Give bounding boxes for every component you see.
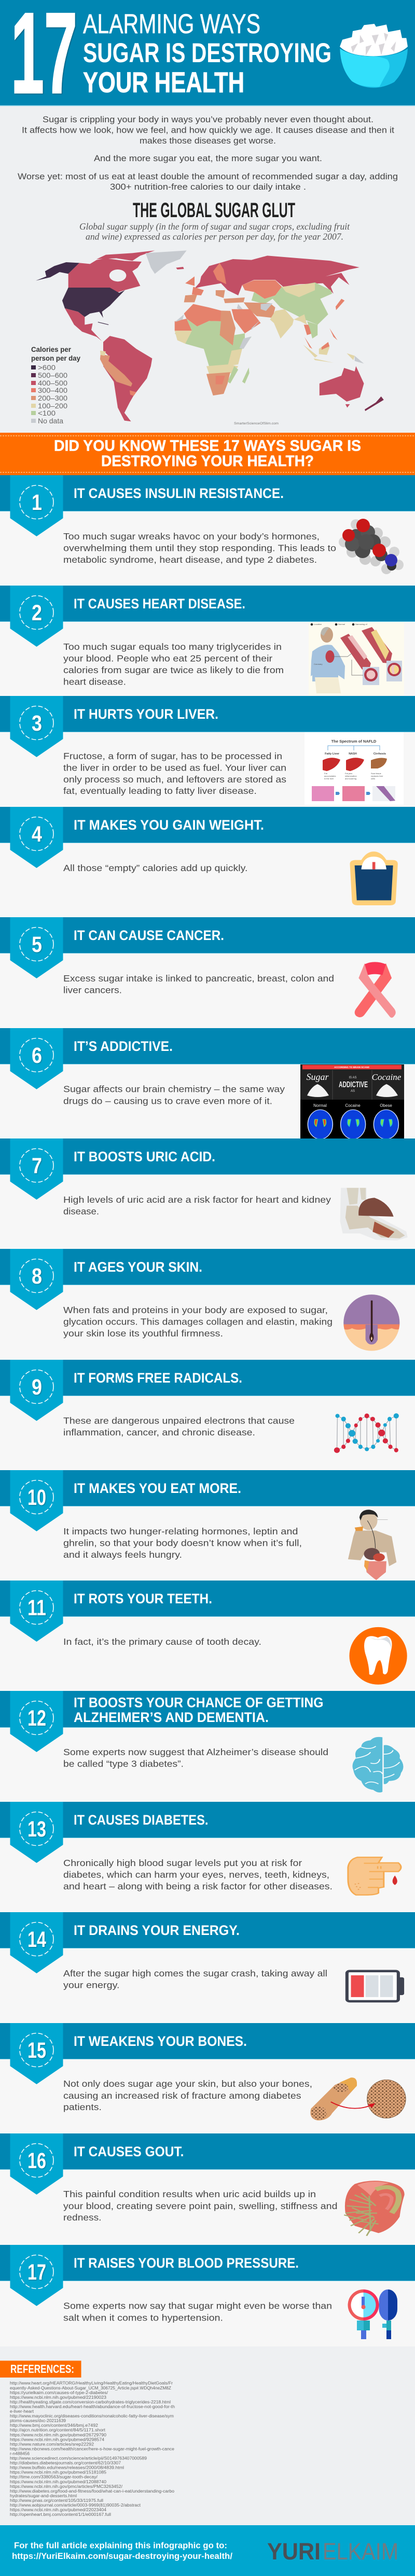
illustration: gout foot <box>340 1188 408 1241</box>
map legend: 400–500 <box>38 379 67 387</box>
body text 17: salt when it comes to hypertension. <box>63 2312 223 2323</box>
illustration: spectrum of NAFLD: and scarring <box>345 777 356 780</box>
header band 12 <box>0 1691 415 1752</box>
header band 3: 3 <box>32 711 42 736</box>
map legend: 300–400 <box>38 386 67 394</box>
body text 13: and heart – along with being a risk factor for other diseases. <box>63 1881 333 1891</box>
reference links: http://openheart.bmj.com/content/1/1/e000167.full <box>10 2512 111 2517</box>
banner: did you know: DID YOU KNOW THESE 17 WAYS SUGAR IS <box>54 437 361 454</box>
reference links: https://www.ncbi.nlm.nih.gov/pubmed/12088740 <box>10 2480 107 2484</box>
body text 16: your blood, creating severe point pain, swelling, stiffness and <box>63 2201 337 2211</box>
header band 15: 15 <box>27 2038 46 2063</box>
icon: molecule <box>339 519 404 574</box>
footer call to action: https://YuriElkaim.com/sugar-destroying-your-health/ <box>12 2552 232 2561</box>
illustration: coronary artery diagram <box>309 622 404 695</box>
reference links: http://www.nbcnews.com/health/cancer/here-s-how-sugar-might-fuel-growth-cance <box>10 2446 175 2451</box>
header band 5 <box>0 917 415 978</box>
header band 12: 12 <box>27 1706 46 1731</box>
body text 6: drugs do – causing us to crave even more of it. <box>63 1095 272 1106</box>
illustration: spectrum of NAFLD: Fat <box>324 772 328 775</box>
header band 10: 10 <box>27 1485 46 1510</box>
title: SUGAR IS DESTROYING <box>83 38 331 68</box>
reference links: r-n488456 <box>10 2451 30 2456</box>
illustration: spectrum of NAFLD: in the liver <box>324 777 334 780</box>
illustration: coronary artery diagram: Location <box>314 623 322 625</box>
icon: weighing scale <box>350 851 398 905</box>
map legend: >600 <box>38 363 56 372</box>
header band 10: IT MAKES YOU EAT MORE. <box>74 1481 241 1496</box>
section 14 <box>0 1912 415 2001</box>
illustration: spectrum of NAFLD: Scar tissue <box>371 772 382 775</box>
body text 10: It impacts two hunger-relating hormones, leptin and <box>63 1526 298 1536</box>
illustration: coronary artery diagram: Coronary <box>314 663 322 665</box>
section 13 <box>0 1802 415 1895</box>
body text 13: diabetes, which can harm your eyes, nerves, teeth, kidneys, <box>63 1870 329 1880</box>
body text 10 <box>63 1526 302 1560</box>
body text 5 <box>63 973 334 995</box>
body text 7: disease. <box>63 1206 99 1217</box>
section 11 <box>0 1581 415 1685</box>
title: YOUR HEALTH <box>83 66 244 98</box>
reference links: https://yurielkaim.com/causes-of-type-2-diabetes/ <box>10 2390 108 2395</box>
body text 10: and it always feels hungry. <box>63 1549 182 1560</box>
body text 15 <box>63 2079 312 2112</box>
illustration: gout tissue <box>344 2181 405 2236</box>
header band 8 <box>0 1249 415 1310</box>
icon: blood pressure gauge <box>348 2289 397 2339</box>
icon: tooth <box>349 1627 407 1685</box>
illustration: digestive system figure <box>348 1510 396 1580</box>
header band 6 <box>0 1028 415 1089</box>
reference links: http://www.mayoclinic.org/diseases-conditions/nonalcoholic-fatty-liver-disease/sym <box>10 2414 174 2418</box>
body text 3: the liver in order to be used as fuel. Your liver can <box>63 763 286 773</box>
body text 8: glycation occurs. This damages collagen and elastin, making <box>63 1316 333 1327</box>
body text 13: Chronically high blood sugar levels put you at risk for <box>63 1858 302 1868</box>
section 9 <box>0 1360 415 1453</box>
section 3 <box>0 696 415 805</box>
header band 17: IT RAISES YOUR BLOOD PRESSURE. <box>74 2255 299 2271</box>
reference links: http://ajcn.nutrition.org/content/84/5/1171.short <box>10 2428 106 2432</box>
header band 9: 9 <box>32 1375 42 1400</box>
header band 17 <box>0 2245 415 2306</box>
header band 11: IT ROTS YOUR TEETH. <box>74 1591 212 1606</box>
body text 16 <box>63 2189 337 2223</box>
reference links: hydrates/sugar-and-desserts.html <box>10 2494 77 2498</box>
header band 13: IT CAUSES DIABETES. <box>74 1812 209 1828</box>
intro text: It affects how we look, how we feel, and how quickly we age. It causes disease and then it <box>22 125 394 135</box>
reference links: http://diabetes.diabetesjournals.org/content/62/10/3307 <box>10 2461 121 2466</box>
illustration: sugar as addictive as cocaine poster: IS AS <box>349 1076 357 1079</box>
body text 7: High levels of uric acid are a risk factor for heart and kidney <box>63 1194 331 1205</box>
map legend: 100–200 <box>38 402 67 410</box>
body text 3 <box>63 751 286 796</box>
body text 12: Some experts now suggest that Alzheimer’s disease should <box>63 1747 328 1757</box>
header band 2: IT CAUSES HEART DISEASE. <box>74 596 245 611</box>
reference links: http://healthyeating.sfgate.com/conversion-carbohydrates-triglycerides-2218.html <box>10 2400 171 2404</box>
map legend <box>31 345 80 425</box>
map credit: SmarterScienceOfSlim.com <box>234 422 279 425</box>
illustration: sugar as addictive as cocaine poster: Cocaine <box>372 1072 402 1082</box>
icon: awareness ribbon <box>355 962 396 1018</box>
references heading <box>0 2361 81 2378</box>
body text 13 <box>63 1858 333 1891</box>
reference links: http://www.buffalo.edu/news/releases/2000/08/4839.html <box>10 2466 124 2470</box>
body text 2 <box>63 642 284 687</box>
body text 16: This painful condition results when uric acid builds up in <box>63 2189 316 2199</box>
section 17 <box>0 2245 415 2339</box>
header band 8: IT AGES YOUR SKIN. <box>74 1259 202 1275</box>
map legend: No data <box>38 417 63 425</box>
illustration: sugar as addictive as cocaine poster: Normal <box>313 1103 327 1108</box>
body text 14: your energy. <box>63 1980 119 1990</box>
icon: low battery <box>347 1971 404 2001</box>
body text 6 <box>63 1084 285 1106</box>
illustration: coronary artery diagram: Narrowing of <box>355 623 368 625</box>
body text 17: Some experts now say that sugar might even be worse than <box>63 2301 332 2311</box>
header panel <box>0 0 415 118</box>
reference links: e-liver-heart <box>10 2409 34 2414</box>
body text 1 <box>63 531 336 565</box>
body text 15: patients. <box>63 2102 102 2112</box>
header band 13: 13 <box>27 1817 46 1842</box>
header band 9: IT FORMS FREE RADICALS. <box>74 1370 242 1386</box>
header band 3: IT HURTS YOUR LIVER. <box>74 706 218 722</box>
logo: Yuri Elkaim: ELKAIM <box>323 2538 398 2565</box>
body text 9: These are dangerous unpaired electrons that cause <box>63 1416 295 1426</box>
illustration: spectrum of NAFLD: replaces liver <box>371 775 383 777</box>
intro text: 300+ nutrition-free calories to our daily intake . <box>110 182 306 192</box>
header band 2 <box>0 586 415 647</box>
header band 16 <box>0 2133 415 2195</box>
header band 1: IT CAUSES INSULIN RESISTANCE. <box>74 486 284 501</box>
title: ALARMING WAYS <box>83 9 260 39</box>
map caption <box>79 221 350 243</box>
header band 16: IT CAUSES GOUT. <box>74 2144 184 2159</box>
reference links: http://www.health.harvard.edu/heart-health/abundance-of-fructose-not-good-for-th <box>10 2404 175 2409</box>
body text 11: In fact, it’s the primary cause of tooth decay. <box>63 1636 261 1647</box>
section 12 <box>0 1691 415 1792</box>
panel: footer <box>0 2525 415 2576</box>
reference links: https://www.ncbi.nlm.nih.gov/pmc/articles/PMC3263452/ <box>10 2484 123 2489</box>
intro text: makes those diseases get worse. <box>140 136 276 146</box>
illustration: spectrum of NAFLD: inflammation <box>345 775 357 777</box>
reference links: http://www.aobjournal.com/article/0003-9969(81)90035-2/abstract <box>10 2503 141 2508</box>
heading: the global sugar glut: THE GLOBAL SUGAR GLUT <box>133 199 295 222</box>
reference links: http://www.heart.org/HEARTORG/HealthyLiving/HealthyEating/HealthyDietGoals/Fr <box>10 2381 173 2386</box>
header band 1 <box>0 475 415 536</box>
footer call to action: For the full article explaining this infographic go to: <box>14 2541 227 2551</box>
body text 3: only process so much, and leftovers are stored as <box>63 774 286 785</box>
header band 11 <box>0 1581 415 1642</box>
body text 8 <box>63 1305 333 1339</box>
body text 1: Too much sugar wreaks havoc on your body’s hormones, <box>63 531 320 542</box>
section 2 <box>0 586 415 695</box>
header band 5: 5 <box>32 932 42 957</box>
header band 1: 1 <box>32 490 42 515</box>
reference links: http://www.diabetes.org/food-and-fitness/food/what-can-i-eat/understanding-carbo <box>10 2489 175 2494</box>
header band 12: ALZHEIMER’S AND DEMENTIA. <box>74 1710 269 1725</box>
footer call to action <box>12 2541 232 2561</box>
body text 17 <box>63 2301 332 2323</box>
illustration: spectrum of NAFLD: Fat plus <box>345 772 352 775</box>
body text 2: your blood. People who eat 25 percent of their <box>63 653 272 663</box>
body text 2: calories from sugar are twice as likely to die from <box>63 665 284 675</box>
illustration: spectrum of NAFLD <box>305 732 404 805</box>
header band 14: 14 <box>27 1927 46 1952</box>
body text 5: Excess sugar intake is linked to pancreatic, breast, colon and <box>63 973 334 984</box>
header band 16: 16 <box>27 2148 46 2173</box>
body text 2: heart disease. <box>63 677 126 687</box>
illustration: sugar as addictive as cocaine poster: Cocaine <box>345 1103 361 1108</box>
section 5 <box>0 917 415 1018</box>
reference links: http://www.nature.com/articles/srep22292 <box>10 2442 94 2446</box>
banner: did you know: DESTROYING YOUR HEALTH? <box>101 453 314 469</box>
logo: Yuri Elkaim: YURI <box>267 2538 321 2565</box>
illustration: spectrum of NAFLD: accumulates <box>324 775 336 777</box>
illustration: spectrum of NAFLD: Cirrhosis <box>374 752 386 756</box>
section 7 <box>0 1138 415 1241</box>
header band 14 <box>0 1912 415 1973</box>
header band 7: 7 <box>32 1154 42 1178</box>
icon: brain <box>352 1737 403 1792</box>
header band 6: IT’S ADDICTIVE. <box>74 1038 173 1054</box>
header band 13 <box>0 1802 415 1863</box>
references heading: REFERENCES: <box>10 2362 74 2375</box>
header band 7 <box>0 1138 415 1200</box>
reference links: https://www.ncbi.nlm.nih.gov/pubmed/9298574 <box>10 2437 105 2442</box>
reference links: http://www.sciencedirect.com/science/article/pii/S0149763407000589 <box>10 2456 147 2460</box>
illustration: sugar as addictive as cocaine poster: ADDICTIVE <box>339 1080 368 1089</box>
header band 6: 6 <box>32 1043 42 1068</box>
body text 3: Fructose, a form of sugar, has to be processed in <box>63 751 282 761</box>
intro text: And the more sugar you eat, the more sugar you want. <box>94 153 322 163</box>
map caption: Global sugar supply (in the form of sugar and sugar crops, excluding fruit <box>79 221 350 232</box>
section 4 <box>0 807 415 905</box>
header band 12: IT BOOSTS YOUR CHANCE OF GETTING <box>74 1695 324 1710</box>
body text 1: overwhelming them until they stop responding. This leads to <box>63 543 336 553</box>
map legend: 500–600 <box>38 371 67 379</box>
body text 2: Too much sugar equals too many triglycerides in <box>63 642 282 652</box>
body text 4: All those “empty” calories add up quickly. <box>63 863 248 873</box>
reference links: http://www.bmj.com/content/346/bmj.e7492 <box>10 2423 99 2428</box>
illustration: spectrum of NAFLD: Fatty Liver <box>325 752 340 756</box>
section 10 <box>0 1470 415 1580</box>
title <box>83 9 331 98</box>
header band 10 <box>0 1470 415 1531</box>
body text 6: Sugar affects our brain chemistry – the same way <box>63 1084 285 1094</box>
icon: sugar bowl <box>340 24 408 88</box>
icon: DNA free radicals <box>334 1413 399 1453</box>
header band 7: IT BOOSTS URIC ACID. <box>74 1149 215 1164</box>
body text 12: be called “type 3 diabetes”. <box>63 1759 184 1769</box>
reference links: https://www.ncbi.nlm.nih.gov/pubmed/22190023 <box>10 2395 107 2400</box>
body text 14 <box>63 1968 327 1990</box>
section 8 <box>0 1249 415 1353</box>
body text 10: ghrelin, so that your body doesn’t know when it’s full, <box>63 1538 302 1548</box>
body text 5: liver cancers. <box>63 985 122 995</box>
map legend: person per day <box>31 354 80 362</box>
header band 4: IT MAKES YOU GAIN WEIGHT. <box>74 817 264 833</box>
illustration: spectrum of NAFLD: cells <box>371 777 375 780</box>
reference links <box>10 2381 175 2517</box>
panel: introduction <box>0 106 415 433</box>
illustration: sugar as addictive as cocaine poster: AS <box>351 1090 355 1093</box>
body text 8: your skin lose its youthful firmness. <box>63 1328 223 1339</box>
icon: skin cross-section <box>343 1294 399 1351</box>
logo: Yuri Elkaim <box>267 2538 398 2565</box>
illustration: sugar as addictive as cocaine poster <box>300 1064 404 1139</box>
section 1 <box>0 475 415 574</box>
illustration: sugar as addictive as cocaine poster: Obese <box>380 1103 392 1108</box>
body text 15: Not only does sugar age your skin, but also your bones, <box>63 2079 312 2089</box>
header band 2: 2 <box>32 601 42 625</box>
world map <box>36 250 384 421</box>
intro text: Sugar is crippling your body in ways you’ve probably never even thought about. <box>43 115 374 124</box>
reference links: equently-Asked-Questions-About-Sugar_UCM_306725_Article.jsp#.WDQh4neZM8Z <box>10 2386 171 2390</box>
illustration: spectrum of NAFLD: NASH <box>349 752 357 756</box>
reference links: https://www.ncbi.nlm.nih.gov/pubmed/26729790 <box>10 2432 107 2437</box>
body text 8: When fats and proteins in your body are exposed to sugar, <box>63 1305 328 1315</box>
reference links: http://time.com/3380563/sugar-tooth-decay/ <box>10 2475 98 2480</box>
reference links: https://www.ncbi.nlm.nih.gov/pubmed/22023404 <box>10 2508 107 2512</box>
map legend: <100 <box>38 409 56 417</box>
header band 9 <box>0 1360 415 1421</box>
header band 15 <box>0 2023 415 2084</box>
header band 15: IT WEAKENS YOUR BONES. <box>74 2033 247 2049</box>
icon: finger blood test <box>348 1857 401 1895</box>
intro text: Worse yet: most of us eat at least double the amount of recommended sugar a day, adding <box>18 172 398 181</box>
body text 7 <box>63 1194 331 1217</box>
body text 16: redness. <box>63 2212 102 2223</box>
header band 4: 4 <box>32 822 42 847</box>
reference links: https://www.ncbi.nlm.nih.gov/pubmed/15181085 <box>10 2470 107 2475</box>
header band 5: IT CAN CAUSE CANCER. <box>74 928 224 943</box>
body text 3: fat, eventually leading to fatty liver disease. <box>63 786 257 796</box>
reference links: http://www.pnas.org/content/105/33/11975.full <box>10 2498 103 2503</box>
illustration: porous bone <box>310 2077 406 2120</box>
body text 14: After the sugar high comes the sugar crash, taking away all <box>63 1968 327 1979</box>
map legend: Calories per <box>31 345 72 353</box>
intro text <box>18 115 398 192</box>
reference links: ptoms-causes/dxc-20211639 <box>10 2418 66 2423</box>
section 15 <box>0 2023 415 2120</box>
header band 4 <box>0 807 415 868</box>
illustration: coronary artery diagram: Normal <box>338 623 345 625</box>
header band 8: 8 <box>32 1264 42 1289</box>
body text 9: inflammation, cancer, and chronic disease. <box>63 1427 255 1438</box>
body text 15: causing an increased risk of fracture among diabetes <box>63 2090 301 2101</box>
map legend: 200–300 <box>38 394 67 402</box>
illustration: sugar as addictive as cocaine poster: Sugar <box>306 1072 329 1082</box>
body text 12 <box>63 1747 328 1769</box>
illustration: sugar as addictive as cocaine poster: ACCORDING TO BRAIN SCANS <box>334 1066 369 1069</box>
section 6 <box>0 1028 415 1139</box>
map caption: and wine) expressed as calories per person per day, for the year 2007. <box>86 231 343 243</box>
banner: did you know <box>0 433 415 475</box>
body text 9 <box>63 1416 295 1438</box>
header band 17: 17 <box>27 2260 46 2285</box>
illustration: spectrum of NAFLD: The Spectrum of NAFLD <box>331 739 377 744</box>
header band 14: IT DRAINS YOUR ENERGY. <box>74 1923 240 1938</box>
section 16 <box>0 2133 415 2236</box>
panel: references <box>0 2346 415 2525</box>
header band 11: 11 <box>27 1596 46 1620</box>
body text 1: metabolic syndrome, heart disease, and type 2 diabetes. <box>63 554 317 565</box>
header band 3 <box>0 696 415 757</box>
